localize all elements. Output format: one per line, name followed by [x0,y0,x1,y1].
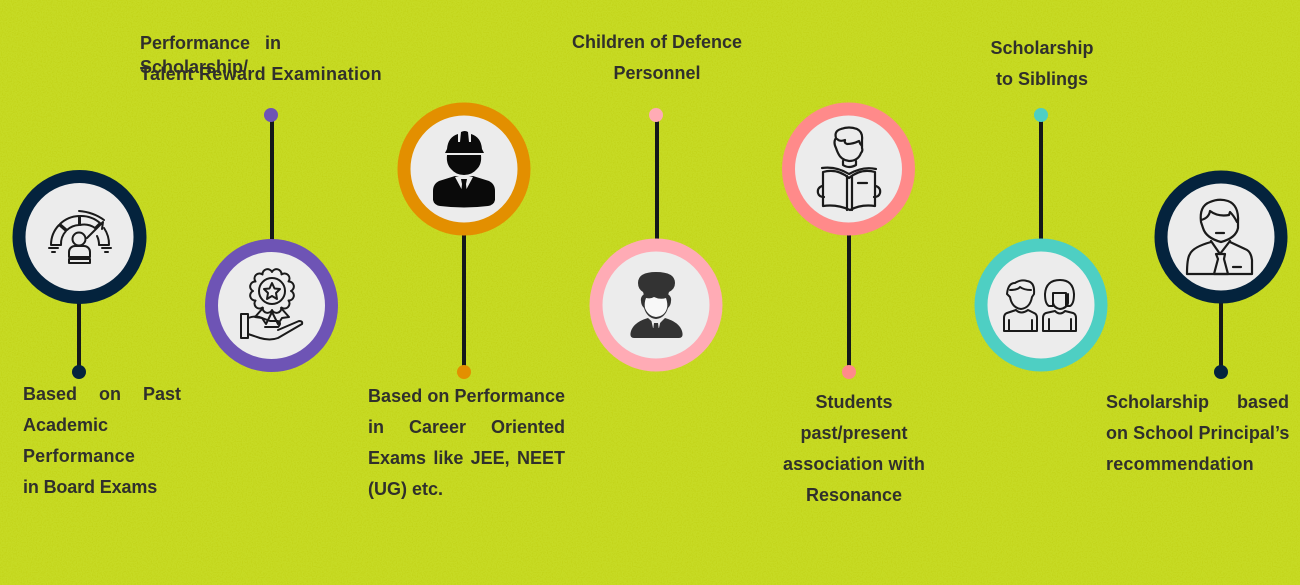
connector 6: line and dot [1034,108,1048,245]
text: scholarship to siblings: Scholarship [990,38,1094,58]
text: based on past academic performance: Performance [23,446,135,466]
text: based on past academic performance: Based on Past [23,384,181,404]
icon: boy and girl [1004,280,1076,331]
connector 1: line and dot [72,300,86,379]
connector 4: line and dot [649,108,663,245]
text: performance in scholarship: Scholarship/ [140,57,248,77]
connector 7: line and dot [1214,300,1228,379]
text: association with Resonance: Resonance [806,485,902,505]
text: principal's recommendation: recommendation [1106,454,1254,474]
text: performance in scholarship: Talent Reward Examination [140,64,382,84]
icon: worker in helmet and suit [433,131,495,208]
text: performance in scholarship [140,33,382,84]
icon: award rosette over open hand [241,269,302,340]
text: based on past academic performance: in Board Exams [23,477,157,497]
text: children of defence personnel: Personnel [613,63,701,83]
icon: person reading [818,128,880,210]
text: principal's recommendation: Scholarship based [1106,392,1289,412]
text: career oriented exams: in Career Oriented [368,417,565,437]
collar and tie [455,176,473,197]
badge 6: siblings [981,245,1101,365]
text: children of defence personnel [572,32,742,83]
connector 5: line and dot [842,230,856,379]
badge 2: reward medal on hand [212,246,332,366]
badge 5: student reading book [788,109,908,229]
icon: performance gauge with person [49,211,111,263]
connector 2: line and dot [264,108,278,245]
text: based on past academic performance: Academic [23,415,108,435]
text: career oriented exams: Based on Performance [368,386,565,406]
icon: principal bust with tie [1187,200,1252,274]
badge 7: school principal [1161,177,1281,297]
badge 3: engineer with hard hat [404,109,524,229]
text: based on past academic performance [23,384,181,497]
connector 3: line and dot [457,230,471,379]
text: career oriented exams [368,386,565,499]
badge 4: defence personnel [596,245,716,365]
badge 1: academic performance gauge [19,176,140,298]
text: performance in scholarship: Performance in [140,33,281,53]
text: children of defence personnel: Children of Defence [572,32,742,52]
icon: officer in peaked cap [630,272,683,338]
text: association with Resonance: association with [783,454,925,474]
text: career oriented exams: Exams like JEE, NEET [368,448,565,468]
text: career oriented exams: (UG) etc. [368,479,443,499]
text: principal's recommendation [1106,392,1289,474]
text: scholarship to siblings: to Siblings [996,69,1088,89]
text: association with Resonance: past/present [800,423,908,443]
text: association with Resonance [783,392,925,505]
text: principal's recommendation: on School Principal’s [1106,423,1289,443]
text: association with Resonance: Students [815,392,892,412]
text: scholarship to siblings [990,38,1094,89]
